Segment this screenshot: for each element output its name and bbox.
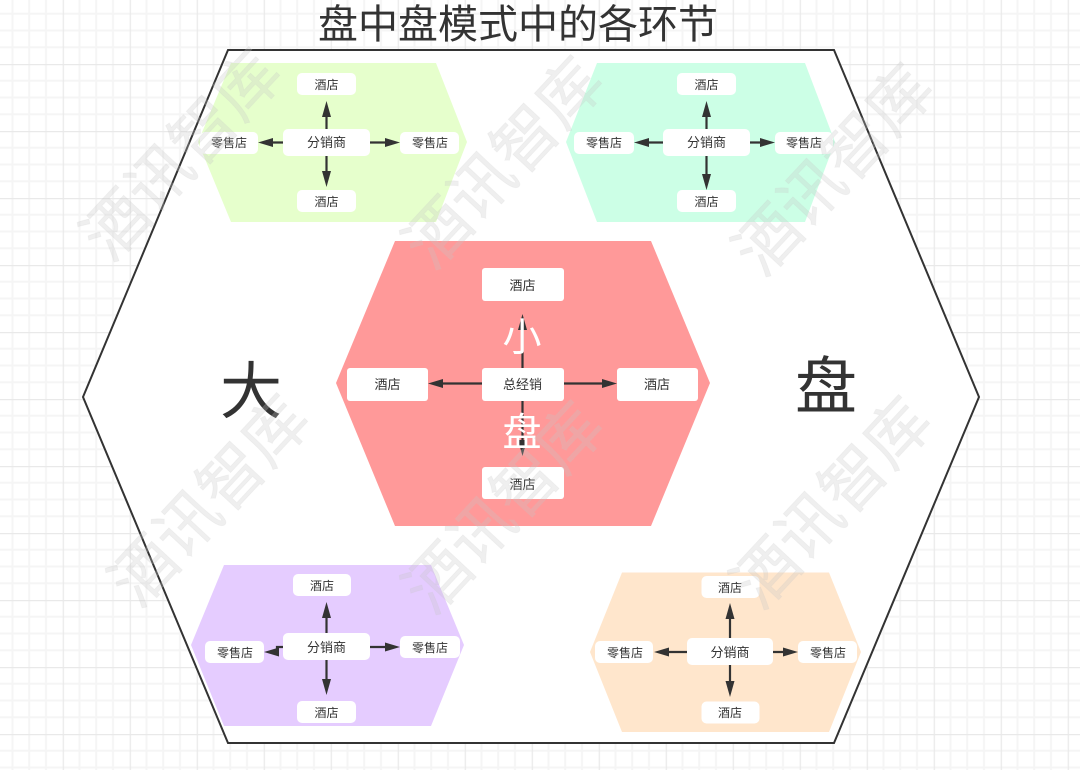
panel: green distributor hexagon: 酒店 [314, 78, 339, 92]
panel: purple distributor hexagon: 酒店 [314, 706, 339, 720]
panel: orange distributor hexagon: 零售店 [810, 645, 846, 660]
panel: green distributor hexagon: 酒店 [314, 195, 339, 209]
watermarks: 酒讯智库 [390, 45, 618, 281]
panel: red small-market hexagon: 酒店 [509, 278, 536, 293]
panel: green distributor hexagon: 分销商 [307, 135, 346, 150]
panel: teal distributor hexagon: 酒店 [694, 195, 719, 209]
label: 大: 大 [220, 358, 282, 427]
panel: purple distributor hexagon: 零售店 [217, 645, 253, 660]
panel: purple distributor hexagon: 酒店 [310, 579, 334, 593]
panel: red small-market hexagon: 酒店 [644, 377, 670, 392]
large outer hexagon: 大盘 [83, 50, 979, 743]
label: 小盘: 盘 [502, 412, 542, 455]
watermarks: 酒讯智库 [390, 390, 618, 626]
panel: orange distributor hexagon: 酒店 [718, 706, 742, 720]
panel: teal distributor hexagon: 分销商 [687, 135, 726, 150]
panel: orange distributor hexagon: 酒店 [718, 581, 742, 595]
panel: red small-market hexagon: 酒店 [374, 377, 401, 392]
panel: red small-market hexagon [336, 241, 710, 526]
panel: teal distributor hexagon: 酒店 [694, 78, 719, 92]
label: 小盘 [502, 317, 542, 455]
panel: red small-market hexagon: 酒店 [509, 477, 536, 492]
watermarks [68, 37, 948, 626]
panel: teal distributor hexagon: 零售店 [586, 135, 622, 150]
panel: orange distributor hexagon: 分销商 [710, 645, 750, 660]
panel: orange distributor hexagon: 零售店 [607, 645, 643, 660]
panel: green distributor hexagon: 零售店 [211, 135, 247, 150]
panel: red small-market hexagon: 总经销 [503, 377, 542, 392]
panel: purple distributor hexagon: 零售店 [412, 640, 448, 655]
watermarks: 酒讯智库 [68, 37, 296, 273]
watermarks: 酒讯智库 [720, 52, 948, 288]
watermarks: 酒讯智库 [96, 383, 324, 619]
panel: purple distributor hexagon [191, 565, 464, 726]
title: 盘中盘模式中的各环节 [318, 3, 718, 47]
panel: purple distributor hexagon: 分销商 [307, 640, 346, 655]
panel: green distributor hexagon [198, 63, 467, 222]
panel: green distributor hexagon: 零售店 [412, 135, 448, 150]
label: 盘: 盘 [795, 353, 857, 422]
panel: teal distributor hexagon [566, 63, 835, 222]
watermarks: 酒讯智库 [718, 385, 946, 621]
panel: orange distributor hexagon [590, 572, 861, 732]
panel: teal distributor hexagon: 零售店 [786, 135, 822, 150]
label: 小盘: 小 [502, 317, 542, 360]
